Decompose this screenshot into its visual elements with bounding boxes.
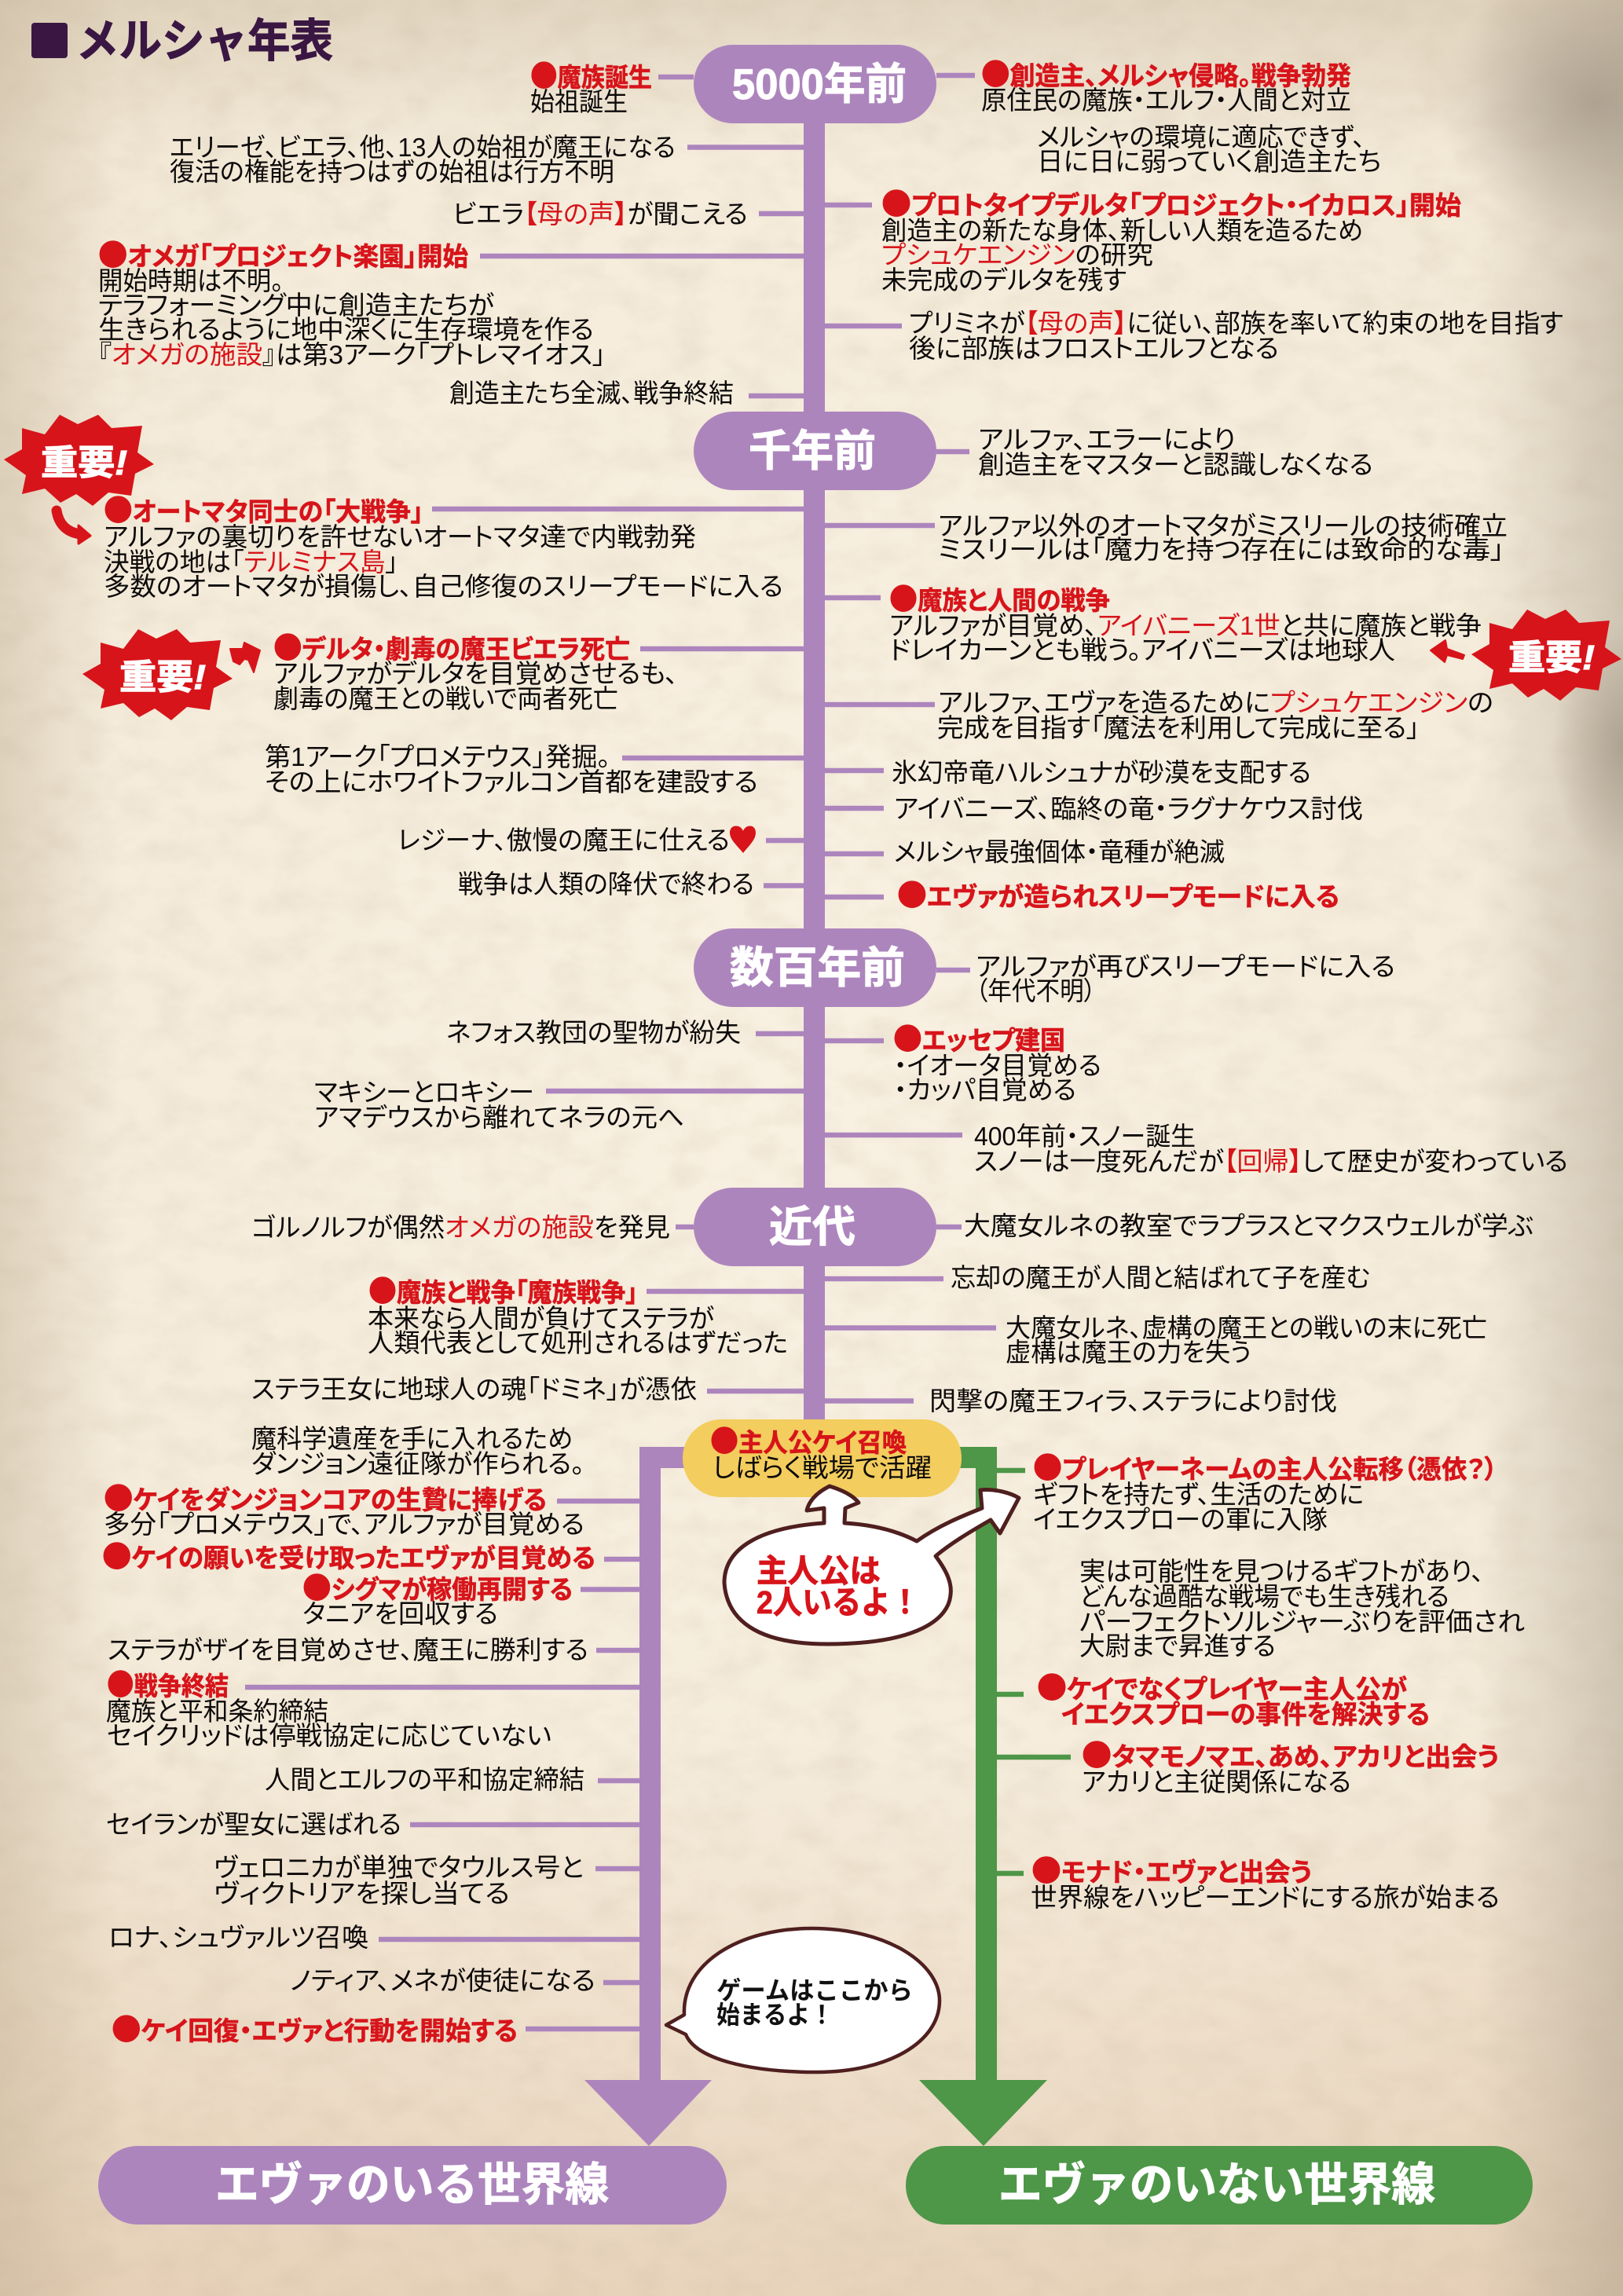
event: デルタ死亡 [273, 624, 804, 713]
event: 創造主の侵略: 原住民の魔族・エルフ・人間と対立 [981, 86, 1351, 115]
event: プロジェクト楽園: 『オメガの施設』は第3アーク「プトレマイオス」 [98, 340, 606, 369]
branch: purple world line [584, 1447, 712, 2146]
event: 聖物紛失: ネフォス教団の聖物が紛失 [446, 1018, 741, 1047]
event: ヴェロニカ: ヴィクトリアを探し当てる [214, 1879, 510, 1908]
era pill: 近代: 近代 [769, 1203, 855, 1251]
event: アルファ 再スリープ: アルファが再びスリープモードに入る [976, 952, 1395, 981]
event: イエクスプローの事件: イエクスプローの事件を解決する [1061, 1700, 1430, 1729]
event: ケイ回復: ●ケイ回復・エヴァと行動を開始する [112, 2005, 518, 2049]
arrow: 重要 2 [230, 643, 260, 672]
event: ヴェロニカ [214, 1853, 639, 1908]
event: マキシーとロキシー: マキシーとロキシー [314, 1078, 534, 1107]
event: 大戦争: ●オートマタ同士の「大戦争」 [104, 486, 423, 529]
event: モナド・エヴァ: ●モナド・エヴァと出会う [1031, 1847, 1312, 1890]
event: イエクスプローの事件 [997, 1664, 1430, 1729]
event: 大魔女ルネ死亡: 大魔女ルネ、虚構の魔王との戦いの末に死亡 [1006, 1313, 1487, 1342]
event: 魔族戦争: ●魔族と戦争「魔族戦争」 [368, 1267, 638, 1310]
event: プリミネ: 後に部族はフロストエルフとなる [909, 334, 1279, 363]
yellow pill: 主人公ケイ召喚: しばらく戦場で活躍 [713, 1453, 932, 1482]
event: モナド・エヴァ: 世界線をハッピーエンドにする旅が始まる [1031, 1883, 1500, 1912]
text: ダンジョン遠征隊 [251, 1424, 584, 1478]
event: ケイ 生贄: ●ケイをダンジョンコアの生贄に捧げる [104, 1474, 547, 1518]
event: プロメテウス発掘: その上にホワイトファルコン首都を建設する [265, 767, 758, 796]
event: プロジェクト楽園: 開始時期は不明。 [98, 266, 284, 295]
event: エヴァ造る [825, 688, 1493, 742]
event: レジーナ: レジーナ、傲慢の魔王に仕える [398, 826, 730, 855]
era pill: 数百年前 [694, 928, 936, 1007]
event: 忘却の魔王: 忘却の魔王が人間と結ばれて子を産む [951, 1263, 1370, 1292]
callout: 主人公は2人いるよ: 主人公は [757, 1553, 881, 1589]
event: 大戦争: アルファの裏切りを許せないオートマタ達で内戦勃発 [104, 522, 696, 551]
event: オメガの施設発見: ゴルノルフが偶然オメガの施設を発見 [251, 1213, 670, 1242]
event: シグマ: タニアを回収する [302, 1599, 498, 1628]
event: ヴェロニカ: ヴェロニカが単独でタウルス号と [214, 1853, 584, 1882]
callout: 主人公は2人いるよ [724, 1486, 1019, 1644]
event: 13人の始祖: エリーゼ、ビエラ、他、13人の始祖が魔王になる [170, 133, 676, 162]
title: メルシャ年表 [76, 16, 333, 67]
event: 大魔女ルネの教室: 大魔女ルネの教室でラプラスとマクスウェルが学ぶ [964, 1211, 1533, 1240]
event: ノティア: ノティア、メネが使徒になる [290, 1966, 595, 1995]
event: アルファ、エラー: アルファ、エラーにより [978, 425, 1236, 454]
event: 大魔女ルネ死亡: 虚構は魔王の力を失う [1006, 1338, 1251, 1367]
event: 13人の始祖 [170, 133, 804, 186]
era pill: 5000年前 [694, 45, 936, 123]
event: タマモノマエ [997, 1731, 1499, 1796]
event: 魔族と人間の戦争 [825, 575, 1482, 665]
branch: green world line [919, 1447, 1047, 2146]
event: セイラン: セイランが聖女に選ばれる [106, 1810, 401, 1839]
event: アルファ、エラー: 創造主をマスターと認識しなくなる [978, 450, 1373, 479]
end pill: エヴァのいない世界線 [906, 2146, 1533, 2225]
event: ミスリール: アルファ以外のオートマタがミスリールの技術確立 [938, 511, 1508, 540]
event: シグマ [302, 1564, 639, 1628]
event: スノー誕生: 400年前・スノー誕生 [974, 1122, 1196, 1151]
event: イエクスプローの事件: ●ケイでなくプレイヤー主人公が [1037, 1664, 1407, 1707]
event: マキシーとロキシー: アマデウスから離れてネラの元へ [314, 1103, 684, 1132]
event: アルファ、エラー [936, 425, 1373, 479]
event: タマモノマエ: ●タマモノマエ、あめ、アカリと出会う [1082, 1731, 1499, 1774]
event: スノー誕生: スノーは一度死んだが【回帰】して歴史が変わっている [974, 1147, 1568, 1176]
end pill: エヴァのいる世界線 [98, 2146, 727, 2225]
badge: 重要 1: 重要! [41, 444, 127, 482]
callout: 主人公は2人いるよ: 2人いるよ！ [757, 1584, 920, 1620]
event: 主人公転移 [997, 1444, 1497, 1534]
event: エヴァ スリープ: ●エヴァが造られスリープモードに入る [897, 871, 1339, 914]
event: デルタ死亡: アルファがデルタを目覚めさせるも、 [273, 659, 678, 688]
event: 魔族と人間の戦争: アルファが目覚め、アイバニーズ1世と共に魔族と戦争 [889, 611, 1482, 640]
event: プロジェクト楽園: テラフォーミング中に創造主たちが [98, 291, 495, 320]
event: 魔族誕生: ●魔族誕生 [530, 52, 652, 95]
event: エヴァ造る: 完成を目指す「魔法を利用して完成に至る」 [937, 713, 1420, 742]
text: 創造主の弱体化 [1037, 123, 1381, 176]
event: 戦争終結: 魔族と平和条約締結 [106, 1697, 328, 1726]
event: デルタ死亡: 劇毒の魔王との戦いで両者死亡 [273, 684, 618, 713]
main timeline spine [804, 79, 825, 1426]
event: プロジェクト楽園: ●オメガ「プロジェクト楽園」開始 [98, 231, 468, 274]
event: フィラ討伐: 閃撃の魔王フィラ、ステラにより討伐 [929, 1386, 1337, 1415]
event: 主人公転移: イエクスプローの軍に入隊 [1033, 1505, 1328, 1534]
event: エッセプ建国 [825, 1015, 1101, 1104]
event: ドミネ憑依: ステラ王女に地球人の魂「ドミネ」が憑依 [251, 1375, 697, 1404]
text: 創造主の弱体化: 日に日に弱っていく創造主たち [1037, 147, 1381, 176]
event: ミスリール: ミスリールは「魔力を持つ存在には致命的な毒」 [938, 535, 1504, 564]
era pill: 近代 [694, 1188, 936, 1266]
event: 魔族誕生: 始祖誕生 [530, 87, 628, 116]
event: 戦争終結: セイクリッドは停戦協定に応じていない [107, 1721, 551, 1750]
callout: ゲームはここから始まるよ [666, 1928, 940, 2072]
text: ダンジョン遠征隊: ダンジョン遠征隊が作られる。 [251, 1449, 584, 1478]
era pill: 5000年前: 5000年前 [732, 60, 907, 108]
event: プロジェクト・イカロス: 未完成のデルタを残す [881, 265, 1127, 295]
era pill: 千年前: 千年前 [749, 427, 876, 475]
era pill: 数百年前: 数百年前 [730, 943, 905, 992]
event: アルファ 再スリープ [936, 952, 1395, 1005]
era pill: 千年前 [694, 412, 936, 490]
event: 竜種絶滅: メルシャ最強個体・竜種が絶滅 [894, 837, 1225, 866]
badge: 重要 3 [1471, 610, 1621, 701]
event: 魔族戦争 [368, 1267, 804, 1357]
end pill: エヴァのいない世界線: エヴァのいない世界線 [998, 2159, 1435, 2210]
event: デルタ死亡: ●デルタ・劇毒の魔王ビエラ死亡 [273, 624, 630, 667]
event: エヴァ造る: アルファ、エヴァを造るために プシュケエンジン の [938, 688, 1493, 717]
event: 創造主全滅: 創造主たち全滅、戦争終結 [449, 379, 734, 408]
text: パーフェクトソルジャー: どんな過酷な戦場でも生き残れる [1079, 1582, 1449, 1611]
yellow pill: 主人公ケイ召喚: ●主人公ケイ召喚 [710, 1417, 907, 1460]
badge: 重要 1 [4, 415, 154, 506]
event: モナド・エヴァ [997, 1847, 1500, 1912]
event: プリミネ [825, 309, 1563, 363]
arrow: 重要 3 [1431, 640, 1464, 662]
event: 13人の始祖: 復活の権能を持つはずの始祖は行方不明 [170, 157, 614, 186]
badge: 重要 2: 重要! [119, 658, 206, 697]
event: シグマ: ●シグマが稼働再開する [302, 1564, 573, 1607]
event: プロジェクト・イカロス: 創造主の新たな身体、新しい人類を造るため [881, 216, 1363, 245]
yellow pill: 主人公ケイ召喚 [683, 1417, 962, 1497]
event: スノー誕生 [825, 1122, 1568, 1176]
text: ダンジョン遠征隊: 魔科学遺産を手に入れるため [251, 1424, 573, 1453]
event: ステラ勝利: ステラがザイを目覚めさせ、魔王に勝利する [108, 1635, 588, 1664]
text: パーフェクトソルジャー: 大尉まで昇進する [1079, 1631, 1276, 1661]
event: プロジェクト・イカロス [825, 180, 1461, 295]
event: エッセプ建国: ・イオータ目覚める [894, 1051, 1101, 1080]
event: プロジェクト楽園: 生きられるように地中深くに生存環境を作る [98, 315, 594, 344]
event: エッセプ建国: ●エッセプ建国 [893, 1015, 1065, 1058]
event: プロジェクト・イカロス: ●プロトタイプデルタ「プロジェクト・イカロス」開始 [881, 180, 1461, 223]
event: ケイ 生贄: 多分「プロメテウス」で、アルファが目覚める [104, 1510, 584, 1539]
badge: 重要 3: 重要! [1508, 639, 1595, 677]
text: パーフェクトソルジャー: 実は可能性を見つけるギフトがあり、 [1079, 1557, 1484, 1586]
event: エッセプ建国: ・カッパ目覚める [894, 1075, 1076, 1104]
event: プロジェクト・イカロス: プシュケエンジンの研究 [881, 240, 1153, 269]
event: エヴァ目覚める: ●ケイの願いを受け取ったエヴァが目覚める [102, 1532, 595, 1576]
event: ラグナケウス討伐: アイバニーズ、臨終の竜・ラグナケウス討伐 [894, 794, 1363, 823]
event: ビエラ 母の声: ビエラ【母の声】が聞こえる [452, 200, 748, 229]
event: 魔族と人間の戦争: ドレイカーンとも戦う。アイバニーズは地球人 [889, 635, 1395, 665]
badge: 重要 2 [82, 629, 233, 720]
event: マキシーとロキシー [314, 1078, 804, 1132]
event: ミスリール [825, 511, 1508, 564]
event: 魔族誕生 [530, 52, 694, 116]
text: パーフェクトソルジャー: パーフェクトソルジャーぶりを評価され [1079, 1607, 1525, 1636]
callout: ゲームはここから始まるよ: ゲームはここから [716, 1976, 913, 2005]
event: 大戦争 [104, 486, 804, 601]
event: 主人公転移: ギフトを持たず、生活のために [1033, 1480, 1364, 1509]
event: 戦争終結 [106, 1661, 639, 1750]
arrow: 重要 1 [57, 511, 90, 544]
event: 大魔女ルネ死亡 [825, 1313, 1487, 1367]
callout: ゲームはここから始まるよ: 始まるよ！ [716, 2001, 833, 2029]
event: プロジェクト楽園 [98, 231, 804, 369]
event: 戦争終わる: 戦争は人類の降伏で終わる [458, 870, 754, 899]
event: 大戦争: 多数のオートマタが損傷し、自己修復のスリープモードに入る [104, 572, 783, 601]
event: ハルシュナ: 氷幻帝竜ハルシュナが砂漠を支配する [892, 758, 1311, 787]
event: 魔族と人間の戦争: ●魔族と人間の戦争 [889, 575, 1110, 618]
event: 大戦争: 決戦の地は「テルミナス島」 [104, 547, 398, 577]
event: タマモノマエ: アカリと主従関係になる [1082, 1767, 1351, 1796]
text: 創造主の弱体化: メルシャの環境に適応できず、 [1037, 123, 1365, 152]
event: アルファ 再スリープ: （年代不明） [976, 976, 1096, 1005]
event: 戦争終結: ●戦争終結 [107, 1661, 229, 1704]
event: 平和協定: 人間とエルフの平和協定締結 [265, 1765, 584, 1794]
event: 主人公転移: ●プレイヤーネームの主人公転移（憑依？） [1033, 1444, 1497, 1487]
event: プロメテウス発掘: 第1アーク「プロメテウス」発掘。 [265, 742, 610, 771]
end pill: エヴァのいる世界線: エヴァのいる世界線 [215, 2159, 609, 2210]
event: ケイ 生贄 [104, 1474, 639, 1539]
text: パーフェクトソルジャー [1079, 1557, 1525, 1661]
event: 魔族戦争: 本来なら人間が負けてステラが [368, 1304, 715, 1333]
event: プリミネ: プリミネが【母の声】に従い、部族を率いて約束の地を目指す [909, 309, 1563, 338]
event: 創造主の侵略: ●創造主、メルシャ侵略。戦争勃発 [981, 50, 1351, 93]
event: プロメテウス発掘 [265, 742, 804, 796]
event: ロナ召喚: ロナ、シュヴァルツ召喚 [108, 1923, 368, 1952]
event: 創造主の侵略 [936, 50, 1351, 115]
event: 魔族戦争: 人類代表として処刑されるはずだった [368, 1328, 788, 1357]
